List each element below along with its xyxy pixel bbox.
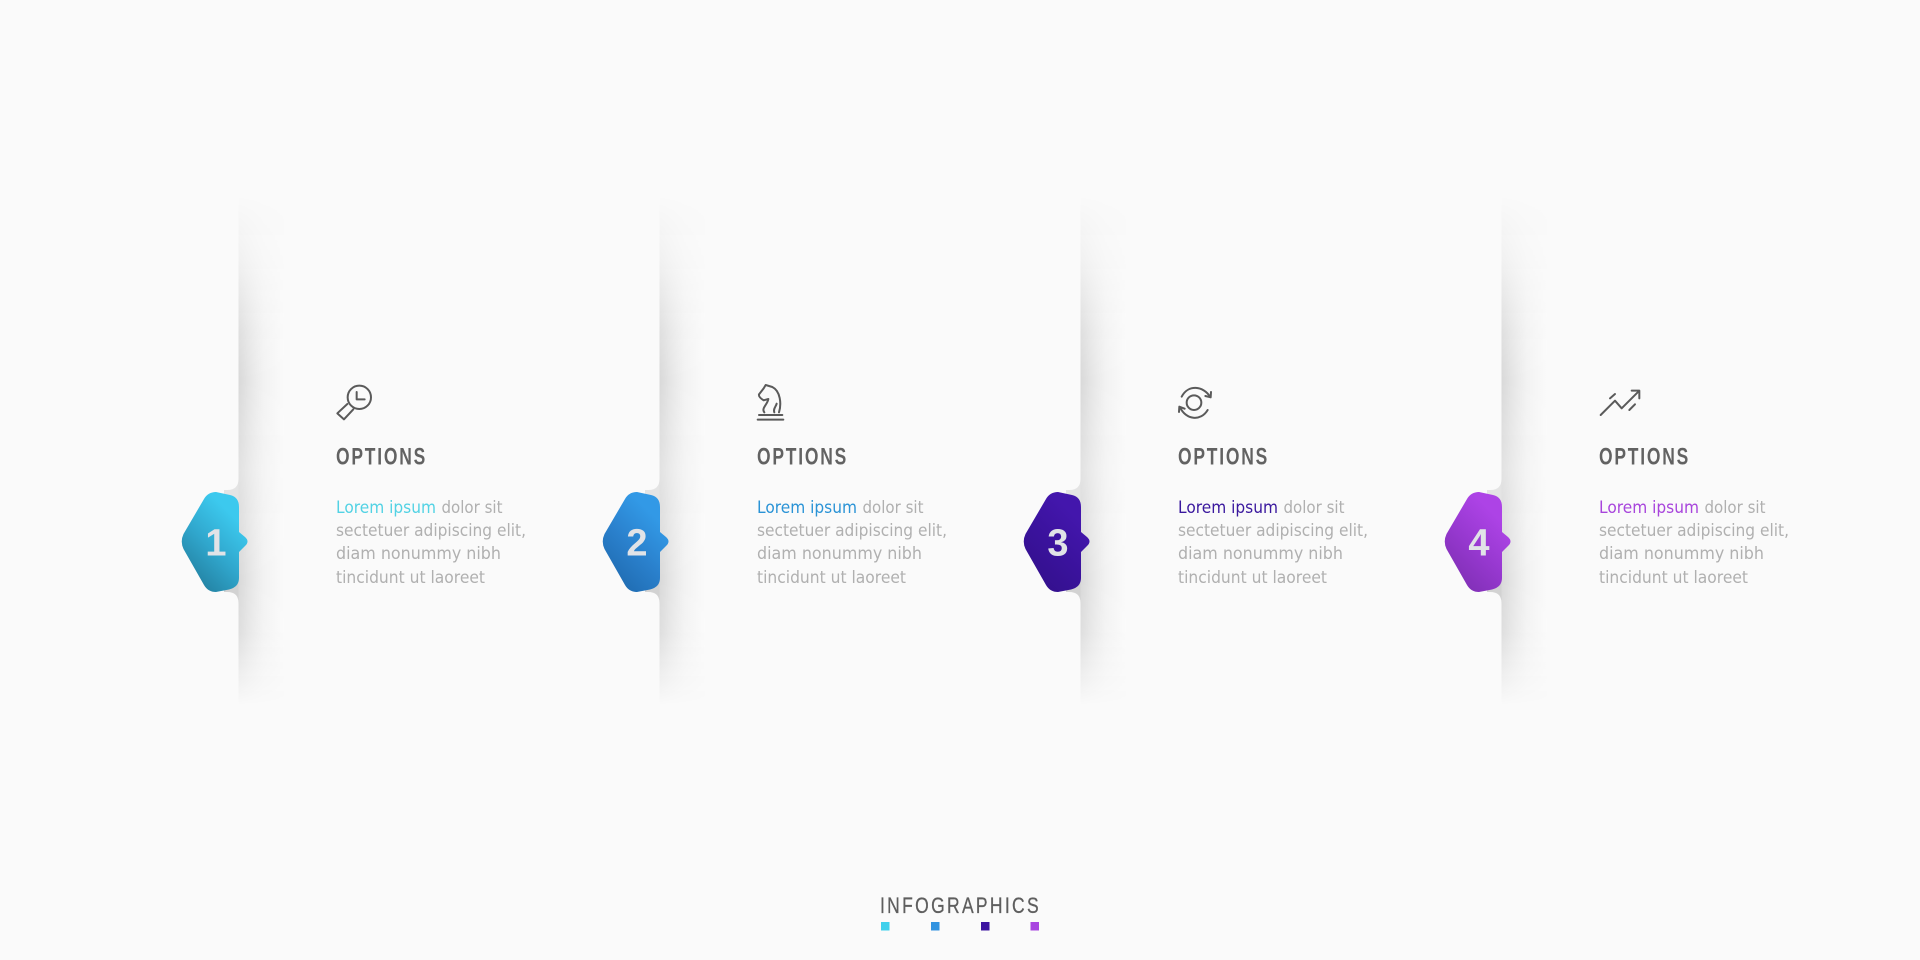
heading 4: OPTIONS xyxy=(1599,444,1690,470)
body text 2 xyxy=(757,498,947,588)
panel: option 4 xyxy=(1444,255,1788,684)
heading 3: OPTIONS xyxy=(1178,444,1269,470)
number badge 1: 1 xyxy=(205,522,227,564)
body text 2: sectetuer adipiscing elit, xyxy=(757,521,947,541)
heading 2: OPTIONS xyxy=(757,444,848,470)
body text 4 xyxy=(1599,498,1789,588)
body text 4: diam nonummy nibh xyxy=(1599,544,1764,564)
body text 1: diam nonummy nibh xyxy=(336,544,501,564)
body text 1: sectetuer adipiscing elit, xyxy=(336,521,526,541)
number badge 1 xyxy=(182,492,248,592)
paper fold shadow 4 xyxy=(1487,255,1526,684)
number badge 4: 4 xyxy=(1468,522,1490,564)
icon: trend arrow xyxy=(1601,391,1639,415)
footer title: INFOGRAPHICS xyxy=(880,893,1041,918)
body text 1: dolor sit xyxy=(442,498,503,518)
body text 4: Lorem ipsum xyxy=(1599,498,1699,518)
body text 3: dolor sit xyxy=(1284,498,1345,518)
body text 2: Lorem ipsum xyxy=(757,498,857,518)
panel: option 3 xyxy=(1024,255,1366,684)
number badge 4 xyxy=(1445,492,1510,592)
body text 3: Lorem ipsum xyxy=(1178,498,1278,518)
body text 2: tincidunt ut laoreet xyxy=(757,568,906,588)
heading 1: OPTIONS xyxy=(336,444,427,470)
panel: option 2 xyxy=(602,255,946,684)
body text 2: dolor sit xyxy=(862,498,924,518)
number badge 2 xyxy=(603,492,668,592)
body text 1: Lorem ipsum xyxy=(336,498,436,518)
body text 3 xyxy=(1178,498,1368,588)
icon: magnifier with clock xyxy=(337,386,371,419)
body text 4: dolor sit xyxy=(1704,498,1766,518)
icon: chess knight xyxy=(758,385,783,420)
footer colour legend xyxy=(881,922,1039,930)
body text 4: sectetuer adipiscing elit, xyxy=(1599,521,1789,541)
number badge 3: 3 xyxy=(1047,522,1069,564)
body text 3: sectetuer adipiscing elit, xyxy=(1178,521,1368,541)
number badge 2: 2 xyxy=(626,522,648,564)
body text 3: tincidunt ut laoreet xyxy=(1178,568,1327,588)
paper fold shadow 2 xyxy=(645,255,684,684)
body text 2: diam nonummy nibh xyxy=(757,544,922,564)
body text 1: tincidunt ut laoreet xyxy=(336,568,485,588)
paper fold shadow 1 xyxy=(224,255,263,684)
paper fold shadow 3 xyxy=(1066,255,1105,684)
body text 3: diam nonummy nibh xyxy=(1178,544,1343,564)
icon: cycle arrows xyxy=(1179,388,1211,418)
panel: option 1 xyxy=(182,255,524,684)
body text 4: tincidunt ut laoreet xyxy=(1599,568,1748,588)
number badge 3 xyxy=(1024,492,1090,592)
body text 1 xyxy=(336,498,526,588)
